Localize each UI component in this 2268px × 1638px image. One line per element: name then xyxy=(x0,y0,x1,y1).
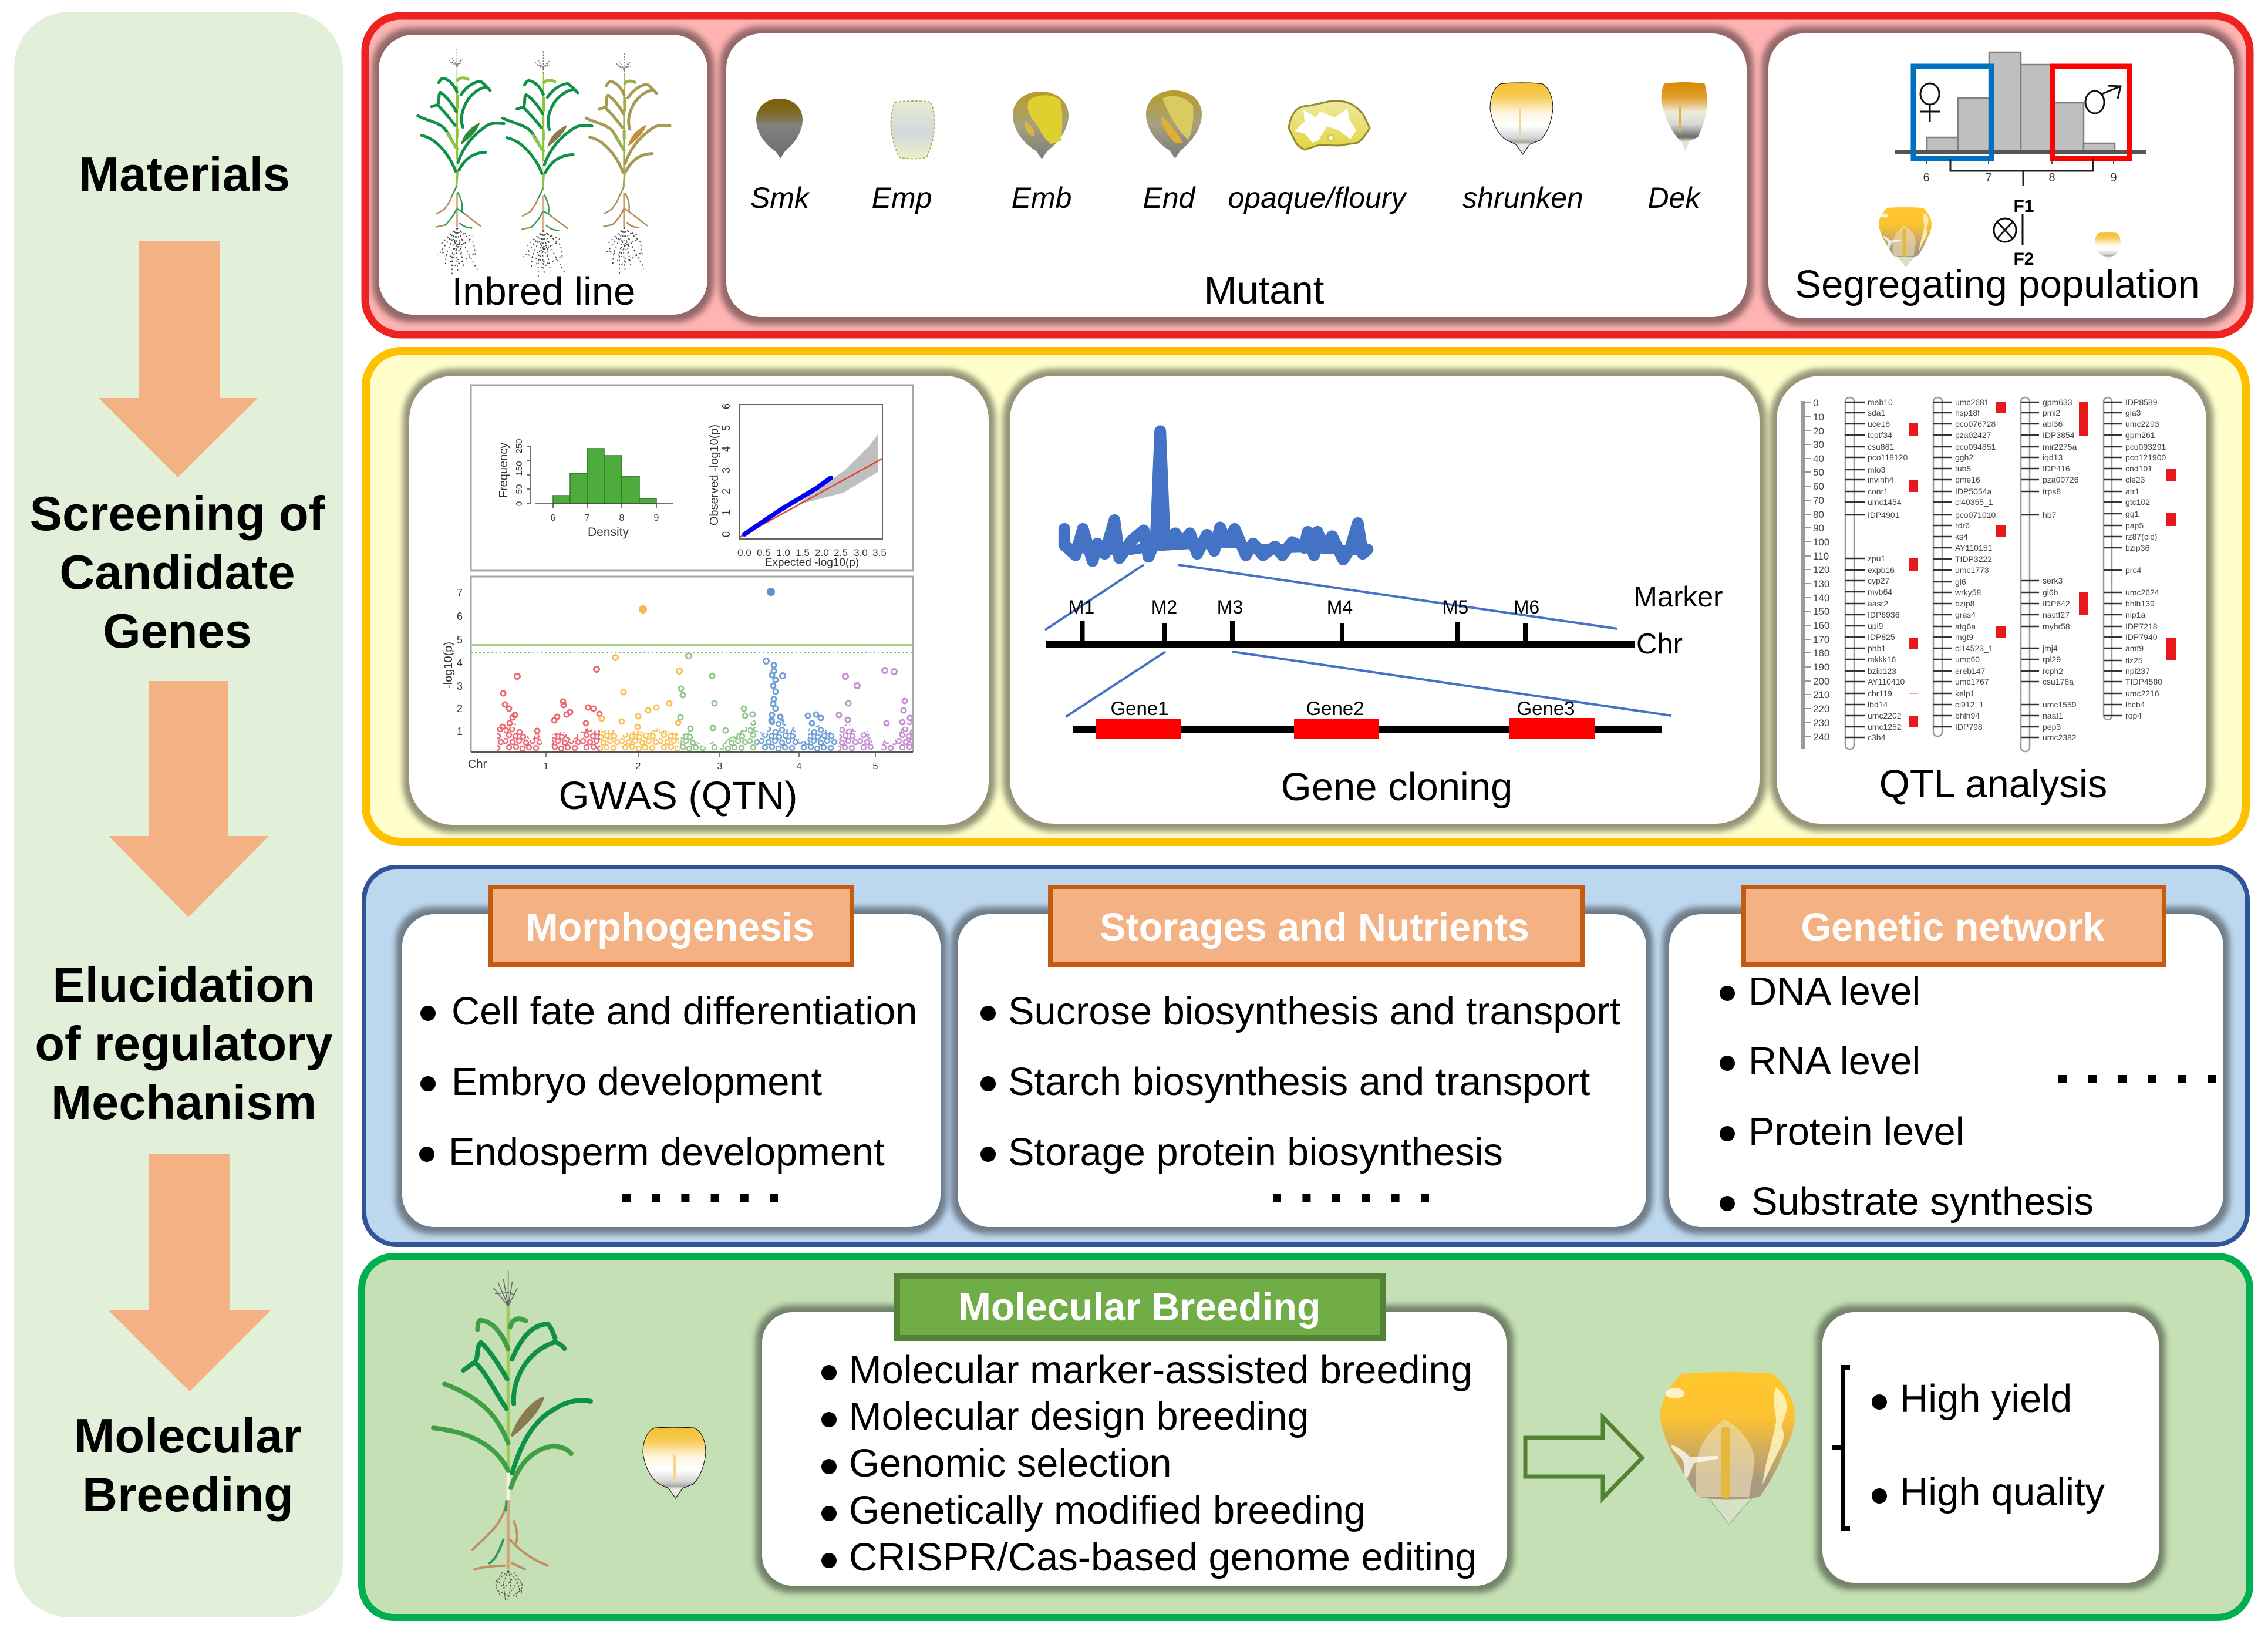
chromosome 2: TIDP3222 xyxy=(1955,554,1992,564)
chromosome 4: pap5 xyxy=(2125,521,2144,530)
chromosome 2: IDP798 xyxy=(1955,722,1983,732)
chromosome 4: atr1 xyxy=(2125,487,2139,496)
point: orange top hit xyxy=(639,605,647,614)
chromosome 3: IDP642 xyxy=(2043,599,2070,608)
chart: cM scale: 140 xyxy=(1813,592,1829,604)
chromosome 4: rz87(clp) xyxy=(2125,532,2157,541)
label: inbred line: Inbred line xyxy=(452,269,635,314)
chromosome 4: rop4 xyxy=(2125,711,2142,720)
chromosome 2: ggh2 xyxy=(1955,453,1973,462)
header: Morphogenesis: Morphogenesis xyxy=(525,906,814,949)
chromosome 2: pco071010 xyxy=(1955,510,1996,520)
list item: CRISPR: CRISPR/Cas-based genome editing xyxy=(849,1536,1477,1579)
chart: trait frequency histogram: 8 xyxy=(619,513,625,523)
chromosome 2: mgt9 xyxy=(1955,632,1973,642)
header: Molecular Breeding xyxy=(897,1276,1383,1338)
chromosome 4: cle23 xyxy=(2125,475,2145,484)
chart: phenotype histogram: 7 xyxy=(1985,171,1992,184)
chart: cM scale: 150 xyxy=(1813,606,1829,617)
chromosome 2: atg6a xyxy=(1955,622,1976,631)
panel: molecular breeding xyxy=(362,1256,2250,1617)
chart: Manhattan plot: 2 xyxy=(457,703,463,714)
heading: Screening of Candidate Genes: Screening of xyxy=(30,486,325,541)
chromosome 4: flz25 xyxy=(2125,656,2143,665)
chromosome 1: aasr2 xyxy=(1868,599,1888,608)
chromosome 2: pco094851 xyxy=(1955,442,1996,451)
chromosome 4: umc2293 xyxy=(2125,419,2159,429)
chart: trait frequency histogram: 150 xyxy=(514,461,524,476)
chromosome with markers: M1 xyxy=(1069,596,1094,618)
chromosome 3: rcph2 xyxy=(2043,666,2063,676)
chromosome 2: AY110151 xyxy=(1955,543,1993,552)
chart: cM scale: 200 xyxy=(1813,676,1829,687)
chromosome 1: AY110410 xyxy=(1868,677,1905,686)
chromosome 1: csu861 xyxy=(1868,442,1894,451)
chart: phenotype histogram xyxy=(1895,52,2146,186)
icon: maize plant xyxy=(433,1270,591,1602)
chromosome 1: cyp27 xyxy=(1868,576,1890,585)
label: segregating population: Segregating population xyxy=(1795,262,2200,306)
chart: cM scale: 170 xyxy=(1813,634,1829,645)
left column background xyxy=(14,12,343,1617)
icon: selfing cross xyxy=(1994,214,2023,245)
label: Marker: Marker xyxy=(1633,581,1723,613)
label: GWAS (QTN): GWAS (QTN) xyxy=(559,774,797,818)
chromosome 1: IDP825 xyxy=(1868,632,1895,642)
list item: genomic selection: Genomic selection xyxy=(849,1442,1171,1485)
chromosome 3: gl6b xyxy=(2043,588,2058,597)
heading: Screening of Candidate Genes: Candidate xyxy=(59,545,295,599)
chromosome 1: IDP6936 xyxy=(1868,610,1900,619)
chromosome 4 xyxy=(2104,397,2176,720)
chromosome 3: pmi2 xyxy=(2043,408,2061,417)
chart: cM scale: 190 xyxy=(1813,662,1829,673)
chromosome 1: lbd14 xyxy=(1868,700,1888,709)
list item: sucrose: Sucrose biosynthesis and transport xyxy=(1008,990,1621,1033)
list item: DNA: DNA level xyxy=(1748,970,1920,1013)
card: breeding outcomes xyxy=(1822,1312,2159,1583)
chart: LOD trace xyxy=(1064,431,1367,561)
chromosome 1: upl9 xyxy=(1868,621,1883,631)
list item: substrate: Substrate synthesis xyxy=(1751,1180,2094,1224)
heading: Elucidation of regulatory Mechanism: Elucidation xyxy=(52,958,315,1012)
chart: cM scale: 40 xyxy=(1813,453,1824,464)
chart: trait frequency histogram: Density xyxy=(588,525,629,539)
label: mutant: Mutant xyxy=(1204,268,1325,312)
kernel: parent xyxy=(643,1427,706,1498)
chromosome 3: umc1559 xyxy=(2043,700,2077,709)
chromosome 3: iqd13 xyxy=(2043,453,2063,462)
ellipsis xyxy=(2058,1075,2216,1083)
chart: cM scale: 210 xyxy=(1813,689,1829,700)
chromosome 1: mab10 xyxy=(1868,397,1893,407)
card: breeding methods xyxy=(762,1276,1507,1586)
chromosome with markers xyxy=(1046,596,1635,648)
chromosome 4: pco093291 xyxy=(2125,442,2166,451)
chart: trait frequency histogram: 6 xyxy=(551,513,556,523)
panel: screening of candidate genes xyxy=(366,351,2246,842)
chromosome 3: jmj4 xyxy=(2042,643,2058,653)
chromosome 4: gla3 xyxy=(2125,408,2141,417)
heading: Screening of Candidate Genes: Genes xyxy=(103,604,252,658)
chromosome 3 xyxy=(2021,397,2088,751)
card: genetic network xyxy=(1669,887,2223,1227)
point: blue top hit xyxy=(767,588,775,596)
header: Genetic network xyxy=(1744,887,2164,965)
chromosome 1: expb16 xyxy=(1868,565,1895,575)
chart: cM scale: 160 xyxy=(1813,620,1829,631)
chromosome 2: tub5 xyxy=(1955,464,1971,473)
chromosome 1: conr1 xyxy=(1868,487,1888,496)
gene map: Gene2 xyxy=(1306,697,1364,719)
chromosome 2 xyxy=(1933,397,2006,736)
label: Gene cloning: Gene cloning xyxy=(1281,765,1512,809)
chromosome 2: rdr6 xyxy=(1955,521,1970,530)
list item: protein: Protein level xyxy=(1748,1110,1964,1154)
card: QTL analysis xyxy=(1777,376,2206,824)
list item: endosperm: Endosperm development xyxy=(449,1131,885,1174)
chromosome 4: bzip36 xyxy=(2125,543,2149,552)
gene map xyxy=(1073,697,1662,739)
chart: phenotype histogram: 9 xyxy=(2110,171,2117,184)
chart: QQ plot: 3 xyxy=(720,467,732,473)
chart: Manhattan plot: 1 xyxy=(544,761,549,771)
chromosome 1: bzip123 xyxy=(1868,666,1896,676)
chart: cM scale xyxy=(1801,397,1829,749)
card: segregating population xyxy=(1768,33,2234,318)
kernel: shrunken xyxy=(1490,83,1553,154)
chart: QQ plot: 3.0 xyxy=(854,547,868,558)
chart: QQ plot: Expected -log10(p) xyxy=(765,557,859,569)
chromosome with markers: M2 xyxy=(1151,596,1177,618)
header: Morphogenesis xyxy=(491,887,852,965)
chromosome 3: pza00726 xyxy=(2043,475,2079,484)
list item: embryo: Embryo development xyxy=(451,1060,823,1104)
chromosome 2: pme16 xyxy=(1955,475,1980,484)
kernel: Dek xyxy=(1662,82,1707,153)
chromosome 2: hsp18f xyxy=(1955,408,1980,417)
chart: QQ plot: 2 xyxy=(720,488,732,494)
chromosome 2: pza02427 xyxy=(1955,430,1991,440)
chart: Manhattan plot: 7 xyxy=(457,587,463,599)
card: morphogenesis xyxy=(402,887,941,1227)
label: Emp: Emp xyxy=(872,181,932,214)
chart: Manhattan plot: 4 xyxy=(797,761,802,771)
chart: QQ plot: Observed -log10(p) xyxy=(708,424,721,525)
arrow: screening to elucidation xyxy=(109,681,269,917)
card: inbred line xyxy=(379,35,707,315)
ellipsis xyxy=(1273,1194,1429,1202)
chromosome 1: zpu1 xyxy=(1868,554,1886,563)
heading: Molecular Breeding: Molecular xyxy=(74,1408,302,1463)
chromosome 4: pco121900 xyxy=(2125,453,2166,462)
chromosome 4: gg1 xyxy=(2125,509,2139,518)
chromosome 2: bzip8 xyxy=(1955,599,1975,608)
chromosome 1: uce18 xyxy=(1868,419,1890,429)
header: Storages and Nutrients: Storages and Nutrients xyxy=(1100,906,1529,949)
chromosome 1: myb64 xyxy=(1868,587,1892,596)
chart: cM scale: 70 xyxy=(1813,495,1824,506)
chromosome 2: gras4 xyxy=(1955,610,1976,619)
gene map: Gene1 xyxy=(1110,697,1169,719)
chart: QQ plot: 1 xyxy=(720,510,732,515)
chart: QQ plot: 0 xyxy=(720,531,732,537)
list item: GM: Genetically modified breeding xyxy=(849,1489,1366,1532)
label: Dek: Dek xyxy=(1648,181,1701,214)
header: Molecular Breeding: Molecular Breeding xyxy=(958,1286,1321,1329)
panel: materials xyxy=(365,16,2250,335)
chart: Manhattan plot: 1 xyxy=(457,726,463,737)
label: Smk: Smk xyxy=(750,181,811,214)
chart: cM scale: 20 xyxy=(1813,426,1824,437)
list item: high quality: High quality xyxy=(1900,1471,2105,1514)
chromosome 4: IDP7218 xyxy=(2125,622,2158,631)
chart: Manhattan plot: 5 xyxy=(457,634,463,646)
list item: cell fate: Cell fate and differentiation xyxy=(451,990,917,1033)
gene map: Gene3 xyxy=(1517,697,1575,719)
chromosome 3: naat1 xyxy=(2043,711,2063,720)
chromosome 1: pco118120 xyxy=(1868,453,1908,462)
chart: Manhattan plot: -log10(p) xyxy=(442,642,455,689)
label: QTL analysis: QTL analysis xyxy=(1879,762,2107,806)
chart: cM scale: 50 xyxy=(1813,467,1824,478)
chromosome 1: sda1 xyxy=(1868,408,1886,417)
chart: trait frequency histogram: Frequency xyxy=(497,443,510,498)
chromosome 1: IDP4901 xyxy=(1868,510,1900,520)
kernel: Emb xyxy=(1013,92,1069,159)
heading: Elucidation of regulatory Mechanism: of regulatory xyxy=(35,1016,333,1071)
list item: RNA: RNA level xyxy=(1748,1040,1920,1083)
zoom lines xyxy=(1045,565,1671,717)
kernel: Emp xyxy=(891,101,935,159)
chart: QQ plot xyxy=(708,403,887,569)
icon: plant 3 (senescing) xyxy=(586,53,670,274)
chart: cM scale: 120 xyxy=(1813,564,1829,575)
chart: QQ plot: 3.5 xyxy=(872,547,887,558)
chromosome 3: serk3 xyxy=(2043,576,2063,585)
chart: QQ plot: 2.5 xyxy=(834,547,848,558)
chart: cM scale: 180 xyxy=(1813,648,1829,659)
kernel: F2 small xyxy=(2095,232,2121,261)
chart: cM scale: 220 xyxy=(1813,703,1829,714)
chromosome 1: invinh4 xyxy=(1868,475,1894,484)
chromosome 3: IDP3854 xyxy=(2043,430,2075,440)
label: shrunken: shrunken xyxy=(1462,181,1583,214)
chart: QQ plot: 6 xyxy=(720,403,732,409)
chromosome 2: pco076728 xyxy=(1955,419,1996,429)
chart: cM scale: 10 xyxy=(1813,412,1824,423)
heading: Molecular Breeding: Breeding xyxy=(82,1467,294,1522)
chromosome 2: bhlh94 xyxy=(1955,711,1980,720)
bracket xyxy=(1832,1367,1850,1528)
label: F2: F2 xyxy=(2013,250,2034,269)
chart: cM scale: 90 xyxy=(1813,523,1824,534)
chromosome 3: nactf27 xyxy=(2043,610,2070,619)
chart: trait frequency histogram: 7 xyxy=(585,513,590,523)
label: Emb: Emb xyxy=(1012,181,1071,214)
chart: QQ plot: 0.5 xyxy=(757,547,771,558)
label: F1: F1 xyxy=(2013,197,2034,216)
chart: QQ plot: 5 xyxy=(720,425,732,431)
chromosome 4: lhcb4 xyxy=(2125,700,2145,709)
chart: Manhattan plot: 5 xyxy=(873,761,878,771)
list item: storage protein: Storage protein biosynthesis xyxy=(1008,1131,1503,1174)
chromosome 4: TIDP4580 xyxy=(2125,677,2162,686)
chromosome 4: gtc102 xyxy=(2125,497,2150,507)
chromosome 3: rpl29 xyxy=(2043,655,2061,664)
chart: QQ plot: 1.5 xyxy=(796,547,810,558)
chart: QQ plot: 1.0 xyxy=(776,547,790,558)
label: End: End xyxy=(1143,181,1197,214)
chromosome 1: c3h4 xyxy=(1868,733,1886,742)
chart: Manhattan plot: Chr xyxy=(468,758,487,771)
chart: cM scale: 110 xyxy=(1813,551,1829,562)
chart: phenotype histogram: 8 xyxy=(2048,171,2055,184)
chart: cM scale: 130 xyxy=(1813,578,1829,589)
kernel: End xyxy=(1146,90,1202,159)
header: Genetic network: Genetic network xyxy=(1801,906,2105,949)
icon: plant 2 xyxy=(503,51,592,278)
chromosome 1: tcptf34 xyxy=(1868,430,1892,440)
chart: cM scale: 230 xyxy=(1813,717,1829,729)
chart: trait frequency histogram xyxy=(471,385,913,571)
chart: Manhattan plot: 3 xyxy=(457,680,463,692)
chromosome 4: umc2216 xyxy=(2125,689,2159,698)
chromosome 3: umc2382 xyxy=(2043,733,2077,742)
chromosome 2: gl6 xyxy=(1955,577,1966,587)
chromosome 2: cl40355_1 xyxy=(1955,497,1993,507)
list item: starch: Starch biosynthesis and transport xyxy=(1008,1060,1590,1104)
chromosome 3: mir2275a xyxy=(2043,442,2077,451)
chromosome 3: trps8 xyxy=(2043,487,2061,496)
chromosome 4: bhlh139 xyxy=(2125,599,2155,608)
chart: Manhattan plot xyxy=(442,577,913,771)
chromosome 3: gpm633 xyxy=(2043,397,2072,407)
chromosome 4: nip1a xyxy=(2125,610,2145,619)
chromosome 1 xyxy=(1845,397,1918,749)
ellipsis xyxy=(622,1194,778,1202)
icon: female symbol xyxy=(1920,105,1940,122)
chromosome 4: umc2624 xyxy=(2125,588,2159,597)
kernel: opaque/floury xyxy=(1289,101,1370,150)
kernel: improved xyxy=(1660,1372,1795,1524)
chromosome 3: hb7 xyxy=(2043,510,2057,520)
chart: trait frequency histogram: 9 xyxy=(654,513,659,523)
chart: Manhattan plot: 2 xyxy=(636,761,641,771)
chromosome with markers: M6 xyxy=(1514,596,1539,618)
chromosome 4: amt9 xyxy=(2125,643,2144,653)
chart: trait frequency histogram: 0 xyxy=(514,501,524,506)
chart: QQ plot: 2.0 xyxy=(815,547,829,558)
chromosome 1: mkkk16 xyxy=(1868,655,1896,664)
chart: Manhattan plot: 6 xyxy=(457,611,463,622)
chromosome 3: pep3 xyxy=(2043,722,2061,732)
card: gene cloning xyxy=(1010,376,1760,824)
chromosome 2: ereb147 xyxy=(1955,666,1986,676)
chromosome 2: ks4 xyxy=(1955,532,1968,541)
icon: plant 1 xyxy=(418,49,504,276)
chromosome 4: IDP7940 xyxy=(2125,632,2158,642)
kernel: F1 parent xyxy=(1879,207,1932,267)
chromosome 3: mybr58 xyxy=(2043,622,2070,631)
chromosome 2: umc1767 xyxy=(1955,677,1989,686)
card: storages and nutrients xyxy=(958,887,1646,1227)
chromosome 1: umc2202 xyxy=(1868,711,1902,720)
list item: marker-assisted: Molecular marker-assisted breeding xyxy=(849,1349,1472,1392)
chromosome 2: kelp1 xyxy=(1955,689,1975,698)
chromosome 4: prc4 xyxy=(2125,565,2141,575)
chart: cM scale: 80 xyxy=(1813,509,1824,520)
chart: cM scale: 0 xyxy=(1813,397,1818,409)
chromosome with markers: M4 xyxy=(1327,596,1353,618)
chart: trait frequency histogram: 250 xyxy=(514,439,524,454)
card: GWAS xyxy=(409,376,989,825)
header: Storages and Nutrients xyxy=(1050,887,1582,965)
chart: phenotype histogram: 6 xyxy=(1923,171,1930,184)
chromosome 3: IDP416 xyxy=(2043,464,2070,473)
chart: Manhattan plot: 3 xyxy=(717,761,723,771)
chromosome 4: IDP8589 xyxy=(2125,397,2158,407)
list item: design: Molecular design breeding xyxy=(849,1395,1309,1438)
chart: QQ plot: 4 xyxy=(720,446,732,452)
chromosome 2: umc1773 xyxy=(1955,565,1989,575)
chromosome 4: cnd101 xyxy=(2125,464,2152,473)
label: Chr: Chr xyxy=(1636,628,1683,660)
chart: cM scale: 100 xyxy=(1813,537,1829,548)
chromosome 2: IDP5054a xyxy=(1955,487,1991,496)
chromosome 1: phb1 xyxy=(1868,643,1886,653)
chromosome with markers: M5 xyxy=(1443,596,1468,618)
chart: cM scale: 30 xyxy=(1813,439,1824,450)
chromosome 3: csu178a xyxy=(2043,677,2074,686)
chromosome 3: abi36 xyxy=(2043,419,2063,429)
list item: high yield: High yield xyxy=(1900,1377,2072,1421)
heading: Materials: Materials xyxy=(79,147,290,201)
chromosome 1: umc1454 xyxy=(1868,497,1902,507)
chromosome 4: gpm261 xyxy=(2125,430,2155,440)
chromosome 1: chr119 xyxy=(1868,689,1892,698)
chromosome 1: mlo3 xyxy=(1868,465,1886,474)
chromosome 1: umc1252 xyxy=(1868,722,1902,732)
chart: Manhattan plot: 4 xyxy=(457,657,463,669)
heading: Elucidation of regulatory Mechanism: Mechanism xyxy=(51,1075,316,1130)
card: mutant xyxy=(726,33,1747,317)
arrow: materials to screening xyxy=(99,241,258,477)
chromosome 2: cl912_1 xyxy=(1955,700,1984,709)
chromosome 2: umc60 xyxy=(1955,655,1980,664)
chart: trait frequency histogram: 50 xyxy=(514,484,524,494)
arrow: elucidation to breeding xyxy=(109,1154,271,1391)
chromosome 2: umc2681 xyxy=(1955,397,1989,407)
arrow: outline to improved kernel xyxy=(1525,1417,1642,1498)
chromosome 2: wrky58 xyxy=(1954,588,1981,597)
kernel: Smk xyxy=(756,99,803,159)
chromosome with markers: M3 xyxy=(1217,596,1243,618)
chromosome 2: cl14523_1 xyxy=(1955,643,1993,653)
label: opaque/floury: opaque/floury xyxy=(1228,181,1407,214)
chart: QQ plot: 0.0 xyxy=(737,547,751,558)
chromosome 4: npi237 xyxy=(2125,666,2150,676)
panel: elucidation of regulatory mechanism xyxy=(364,867,2247,1245)
chart: cM scale: 240 xyxy=(1813,732,1829,743)
chart: cM scale: 60 xyxy=(1813,481,1824,492)
icon: female ring xyxy=(1920,83,1939,105)
icon: male symbol xyxy=(2085,86,2121,113)
